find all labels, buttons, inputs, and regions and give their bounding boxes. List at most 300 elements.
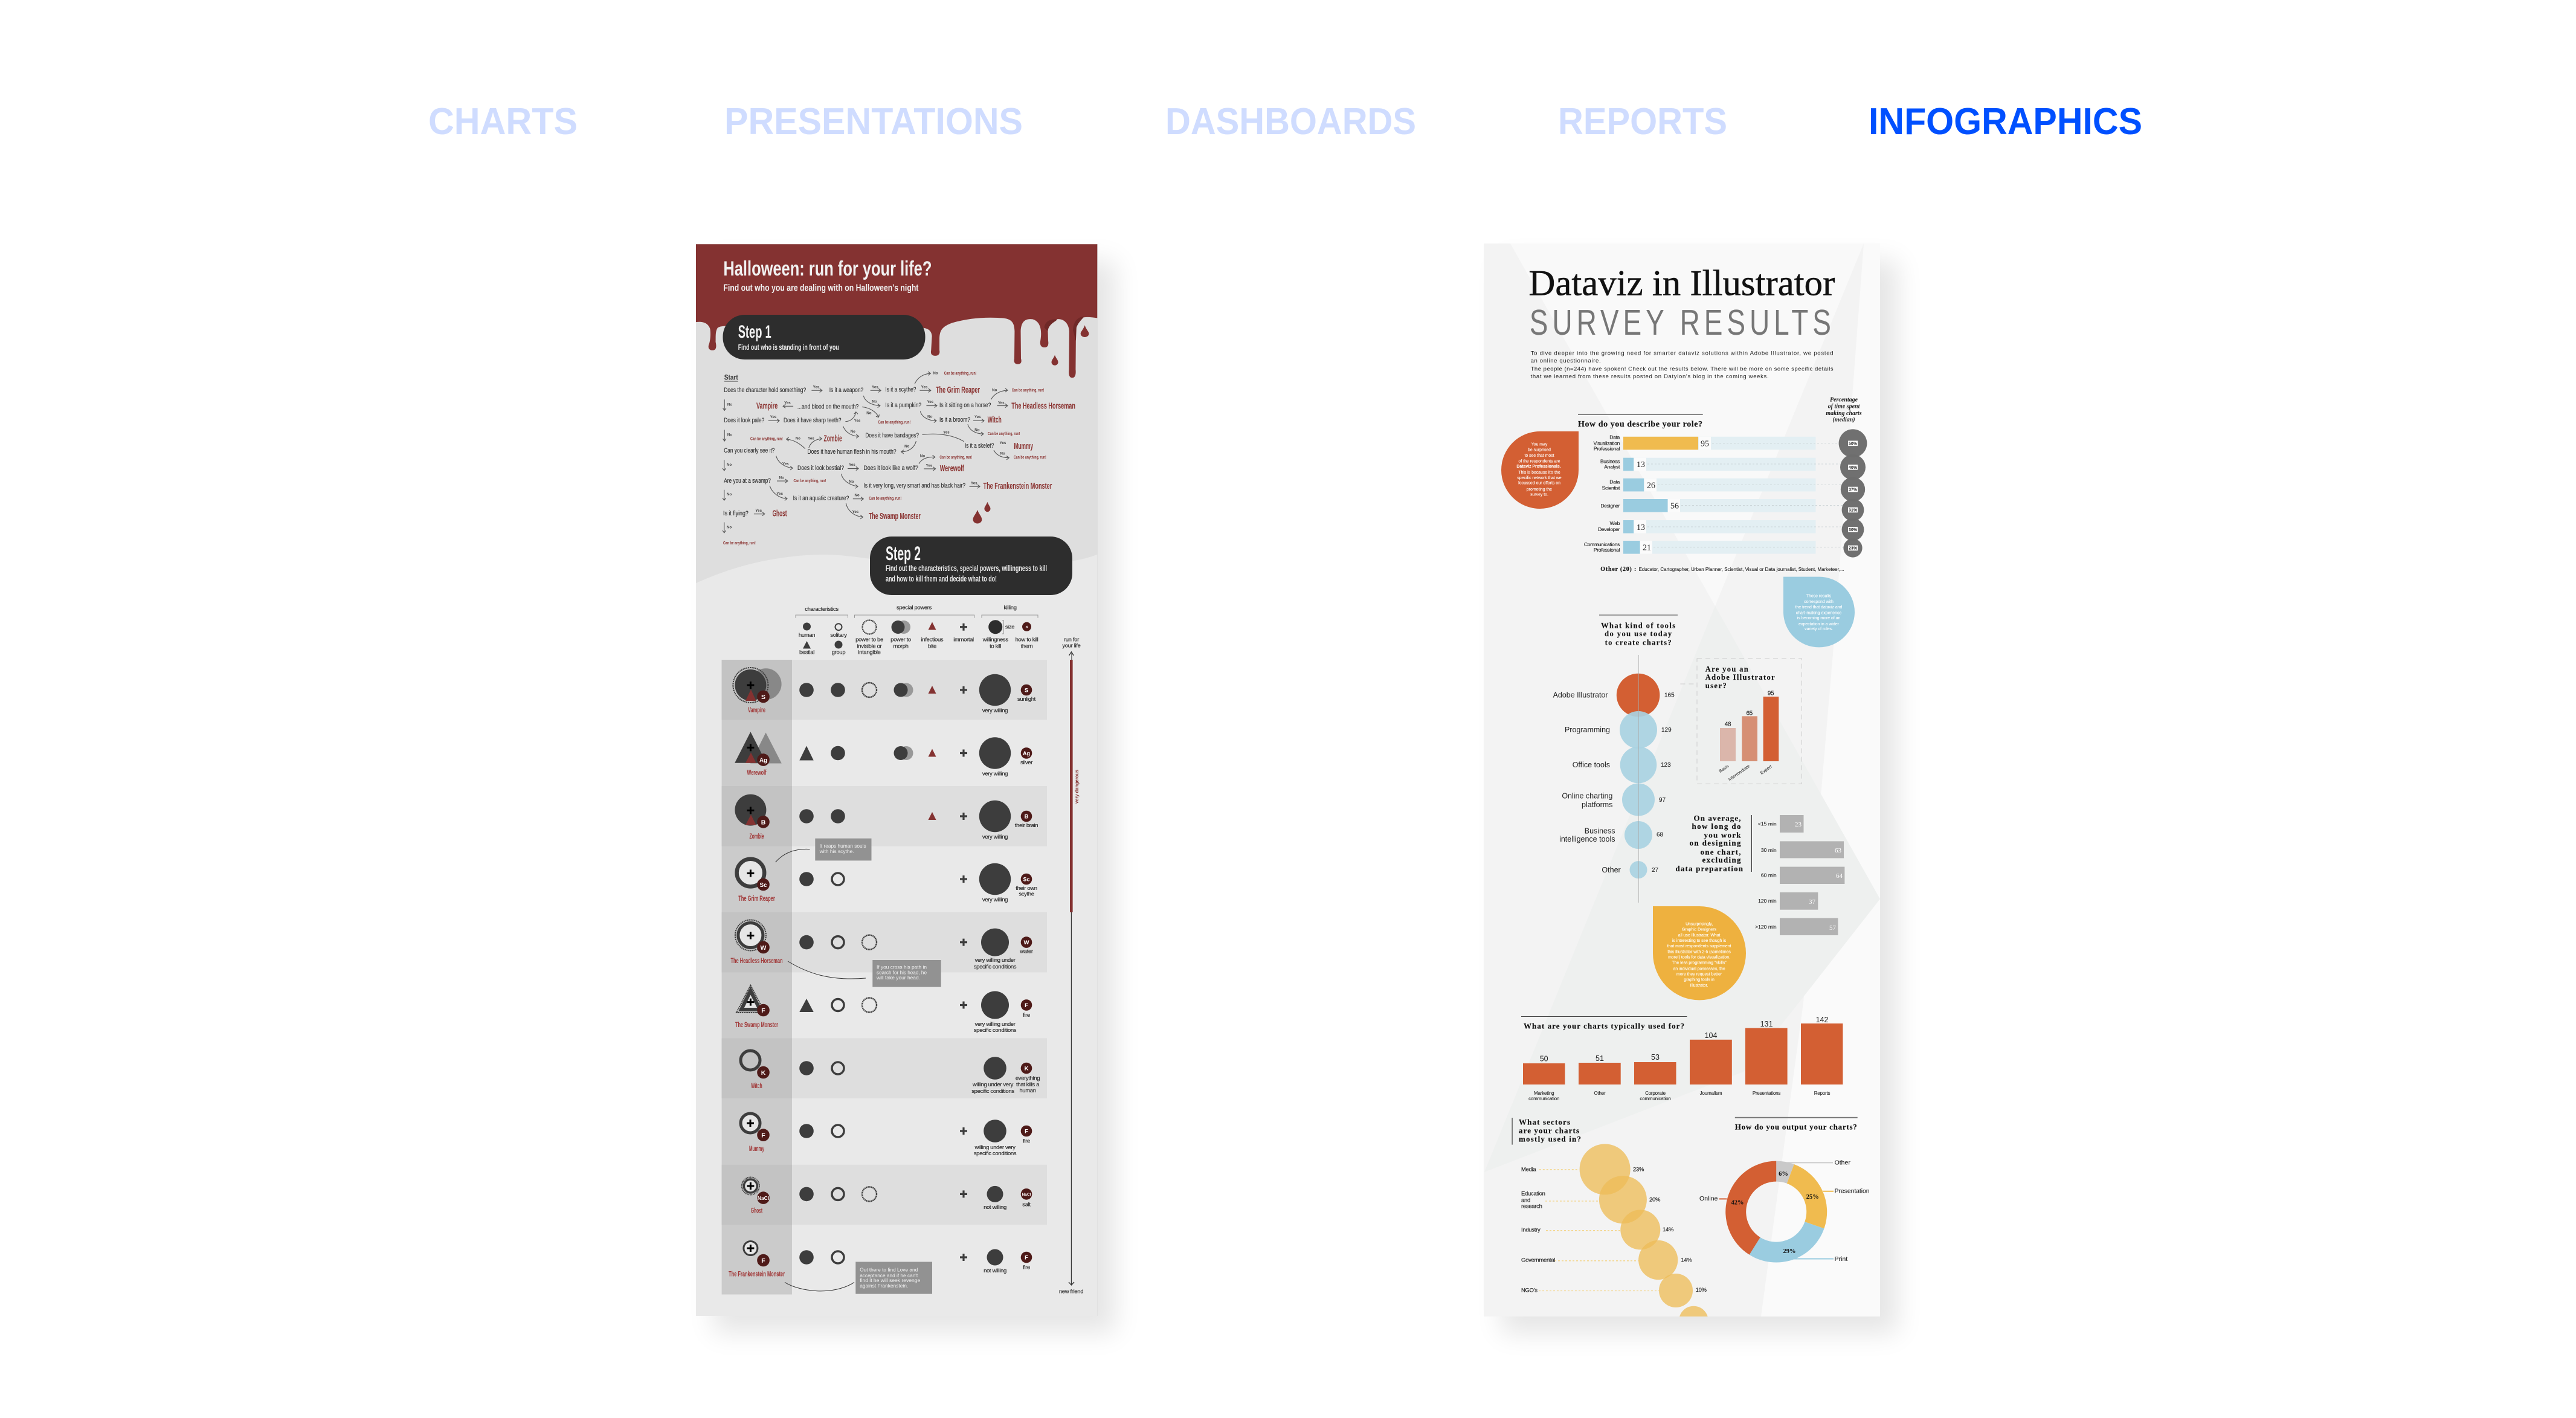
row: The Headless Horseman	[731, 920, 1033, 970]
flowchart questions: Is it flying?	[723, 510, 749, 517]
callout: yellow bubble: The less programming "skills"	[1672, 961, 1727, 965]
row: Zombie: B	[761, 819, 766, 826]
callout: yellow bubble	[1653, 906, 1746, 1000]
table column headers and legend: killing	[1003, 604, 1017, 611]
row: The Frankenstein Monster: fire	[1023, 1264, 1030, 1271]
callout: orange bubble: promoting the	[1527, 488, 1552, 492]
chart: output donut	[1699, 1117, 1870, 1263]
flowchart yes and no labels: No	[933, 372, 938, 376]
intro text: To dive deeper into the growing need for smarter dataviz solutions within Adobe Illustrator, we posted	[1531, 350, 1834, 356]
flowchart outcomes	[723, 370, 1075, 546]
row: Witch: that kills a	[1016, 1081, 1040, 1088]
table column headers and legend: to kill	[990, 643, 1002, 650]
chart: how do you describe your role: Data	[1609, 479, 1620, 485]
flowchart yes and no labels: No	[866, 411, 872, 415]
panel: Halloween infographic	[696, 244, 1098, 1316]
flowchart outcomes: Can be anything, run!	[869, 495, 901, 501]
callout: blue bubble: is becoming more of an	[1797, 616, 1840, 620]
callout: yellow bubble: Illustrator.	[1690, 984, 1708, 988]
navigation tabs: INFOGRAPHICS	[1869, 101, 2142, 143]
chart: time per chart: <15 min	[1758, 821, 1777, 827]
chart: how do you describe your role: Developer	[1598, 526, 1620, 532]
row: Zombie: their brain	[1015, 822, 1038, 829]
flowchart questions: Are you at a swamp?	[724, 477, 771, 485]
row: Witch: specific conditions	[971, 1088, 1014, 1095]
chart: adobe illustrator user: user?	[1705, 682, 1727, 690]
flowchart yes and no labels: No	[872, 399, 877, 404]
flowchart questions: Does it look bestial?	[797, 465, 844, 472]
callout: frankenstein: find it he will seek revenge	[860, 1277, 920, 1283]
flowchart yes and no labels: No	[727, 492, 732, 497]
flowchart yes and no labels: Yes	[808, 437, 814, 441]
callout: blue bubble: variety of roles.	[1805, 627, 1833, 631]
flowchart yes and no labels: Yes	[849, 463, 855, 467]
time share circles	[1839, 429, 1867, 558]
callout: orange bubble: This is because it's the	[1518, 471, 1560, 475]
row: The Swamp Monster: F	[1025, 1002, 1028, 1009]
chart: output donut: Other	[1835, 1159, 1850, 1167]
chart: tools used: Business	[1585, 827, 1615, 835]
callout: frankenstein	[785, 1262, 932, 1294]
chart: how do you describe your role: 56	[1670, 501, 1679, 511]
flowchart yes and no labels: No	[796, 437, 800, 441]
chart: sectors: 10%	[1696, 1287, 1707, 1294]
chart: tools used: intelligence tools	[1559, 835, 1615, 843]
chart: time per chart: 63	[1835, 847, 1841, 854]
callout: grim reaper: with his scythe.	[819, 848, 854, 854]
flowchart yes and no labels: Yes	[813, 385, 820, 389]
chart: how do you describe your role: Data	[1609, 434, 1620, 440]
callout: yellow bubble: Graphic Designers	[1682, 928, 1717, 932]
step 2 box: and how to kill them and decide what to do!	[886, 574, 997, 584]
chart: adobe illustrator user: Adobe Illustrator	[1705, 673, 1775, 682]
danger scale arrow: new friend	[1059, 1289, 1083, 1295]
callout: blue bubble: expectation in a wider	[1798, 622, 1840, 627]
flowchart outcomes: Vampire	[756, 402, 778, 411]
title	[1528, 263, 1835, 343]
time share circles: 50%	[1849, 442, 1858, 446]
row: Zombie: very willing	[982, 834, 1008, 840]
row: The Swamp Monster	[735, 985, 1032, 1034]
chart: output donut: 42%	[1731, 1200, 1744, 1206]
chart: sectors: 23%	[1633, 1167, 1644, 1173]
chart: charts used for	[1521, 1016, 1843, 1101]
callout: frankenstein: acceptance and if he can't	[860, 1272, 918, 1278]
row: The Grim Reaper: very willing	[982, 897, 1008, 903]
flowchart yes and no labels: Yes	[784, 401, 791, 405]
row: Zombie: Zombie	[749, 833, 764, 840]
chart: output donut: Presentation	[1835, 1188, 1870, 1195]
row: The Grim Reaper: The Grim Reaper	[738, 895, 775, 903]
chart: how do you describe your role: Designer	[1600, 503, 1620, 509]
row: Werewolf: Ag	[1023, 750, 1030, 756]
chart: charts used for: communication	[1640, 1096, 1671, 1101]
row: The Swamp Monster: F	[761, 1007, 765, 1014]
callout: headless horseman: search for his head, he	[877, 970, 927, 976]
row: Witch	[741, 1051, 1040, 1095]
blood header and lower wave	[696, 244, 1097, 1316]
flowchart questions: Does it have human flesh in his mouth?	[807, 448, 897, 456]
row: Witch: K	[761, 1069, 766, 1077]
chart: adobe illustrator user: 48	[1725, 721, 1731, 727]
flowchart yes and no labels: Yes	[974, 415, 981, 419]
row: Vampire: sunlight	[1017, 696, 1036, 703]
chart: charts used for: Other	[1594, 1091, 1606, 1096]
flowchart yes and no labels: No	[904, 444, 910, 448]
callout: orange bubble: survey to.	[1530, 493, 1548, 497]
flowchart outcomes: The Frankenstein Monster	[984, 482, 1052, 491]
chart: time per chart: 57	[1829, 924, 1837, 932]
row: Mummy: F	[761, 1132, 765, 1139]
title: Halloween: run for your life?	[723, 257, 932, 280]
flowchart yes and no labels: Yes	[854, 419, 861, 423]
row: The Headless Horseman: very willing under	[974, 957, 1016, 964]
row: The Frankenstein Monster	[729, 1241, 1032, 1278]
chart: sectors: What sectors	[1519, 1118, 1570, 1126]
flowchart outcomes: Can be anything, run!	[988, 431, 1020, 436]
table column headers and legend: size	[1005, 624, 1014, 631]
flowchart questions: Is it a weapon?	[829, 387, 863, 394]
flowchart outcomes: Witch	[988, 416, 1002, 425]
row: Mummy: F	[1025, 1129, 1028, 1135]
row: The Frankenstein Monster: F	[1025, 1254, 1028, 1262]
chart: time per chart: 30 min	[1761, 847, 1777, 853]
chart: tools used: Other	[1602, 866, 1621, 874]
chart: adobe illustrator user: Expert	[1759, 764, 1773, 776]
danger scale arrow	[1059, 652, 1083, 1295]
row: The Grim Reaper: Sc	[1023, 876, 1030, 882]
flowchart yes and no labels: No	[727, 433, 732, 437]
row: The Grim Reaper: scythe	[1019, 891, 1034, 898]
chart: charts used for: What are your charts typically used for?	[1524, 1021, 1684, 1030]
table column headers and legend: immortal	[953, 637, 974, 643]
icon: blood drops	[973, 325, 1089, 523]
chart: tools used: 165	[1664, 692, 1675, 699]
table column headers and legend: group	[832, 649, 845, 656]
chart: charts used for: 142	[1816, 1016, 1828, 1024]
callout: grim reaper	[776, 839, 871, 862]
chart: how do you describe your role: 95	[1701, 440, 1709, 449]
intro text: that we learned from these results posted on Datylon's blog in the coming weeks.	[1531, 373, 1769, 380]
flowchart outcomes: Can be anything, run!	[1014, 454, 1046, 460]
row: Werewolf: Werewolf	[747, 770, 767, 777]
chart: how do you describe your role: 13	[1637, 460, 1645, 469]
flowchart yes and no labels: Yes	[971, 482, 977, 486]
chart: charts used for: 50	[1540, 1055, 1548, 1063]
flowchart yes and no labels: No	[974, 428, 980, 432]
table column headers and legend: bite	[928, 643, 936, 650]
row: Witch: everything	[1016, 1075, 1040, 1082]
callout: yellow bubble: that most respondents supplement	[1667, 944, 1731, 949]
chart: sectors: research	[1521, 1204, 1542, 1210]
flowchart outcomes: Can be anything, run!	[944, 370, 976, 376]
flowchart outcomes: Can be anything, run!	[750, 436, 783, 441]
chart: how do you describe your role	[1578, 396, 1867, 573]
chart: tools used: Programming	[1565, 726, 1610, 734]
row: The Headless Horseman: W	[1024, 939, 1029, 946]
row: The Grim Reaper	[737, 859, 1037, 903]
row: The Swamp Monster: The Swamp Monster	[735, 1022, 778, 1029]
chart: time per chart: 37	[1809, 898, 1816, 906]
chart: time per chart	[1676, 813, 1844, 935]
chart: tools used: 129	[1661, 727, 1672, 733]
row: The Grim Reaper: Sc	[759, 882, 767, 889]
flowchart yes and no labels: No	[779, 476, 784, 480]
flowchart yes and no labels: No	[727, 525, 732, 529]
flowchart yes and no labels: Yes	[755, 509, 762, 513]
chart: sectors: and	[1521, 1197, 1530, 1204]
flowchart yes and no labels: Yes	[872, 385, 878, 389]
table column headers and legend: power to	[890, 637, 911, 643]
table column headers and legend: run for	[1064, 637, 1079, 643]
chart: time per chart: on designing	[1689, 839, 1741, 848]
flowchart yes and no labels: Yes	[852, 510, 859, 514]
flowchart questions: Does it have sharp teeth?	[784, 417, 841, 424]
flowchart questions: Does the character hold something?	[724, 387, 806, 394]
callout: orange bubble: focussed our efforts on	[1518, 482, 1560, 486]
flowchart questions: Is it a broom?	[939, 416, 970, 424]
chart: output donut: 29%	[1783, 1248, 1795, 1255]
chart: how do you describe your role: Web	[1610, 520, 1620, 526]
chart: how do you describe your role: Business	[1600, 458, 1620, 464]
flowchart yes and no labels: Yes	[770, 415, 777, 419]
navigation tabs: REPORTS	[1558, 101, 1727, 143]
chart: output donut: 6%	[1779, 1171, 1788, 1178]
row: Witch: human	[1019, 1088, 1036, 1094]
row: Witch: Witch	[751, 1083, 762, 1090]
time share circles: 23%	[1849, 546, 1858, 551]
flowchart questions: ...and blood on the mouth?	[797, 404, 858, 411]
step 1 box	[723, 315, 926, 359]
callout: blue bubble	[1783, 577, 1855, 647]
chart: tools used	[1553, 615, 1678, 903]
callout: blue bubble: chart-making experience	[1796, 611, 1841, 615]
time share circles: 30%	[1849, 528, 1858, 532]
callout: orange bubble: Dataviz Professionals.	[1516, 465, 1561, 469]
flowchart yes and no labels: No	[1000, 452, 1005, 456]
chart: sectors: mostly used in?	[1519, 1134, 1581, 1143]
table column headers and legend: bestial	[799, 649, 814, 656]
chart: output donut: 25%	[1806, 1194, 1819, 1200]
row: Mummy: specific conditions	[974, 1150, 1017, 1157]
callout: orange bubble: to see that most	[1524, 454, 1554, 458]
step 2 box	[870, 537, 1072, 595]
chart: tools used: 123	[1661, 762, 1671, 769]
flowchart questions: Is it very long, very smart and has black hair?	[864, 482, 965, 489]
flowchart questions: Start	[724, 373, 738, 381]
title	[723, 257, 932, 294]
row: The Headless Horseman: water	[1019, 949, 1033, 955]
title: Dataviz in Illustrator	[1528, 263, 1835, 303]
row: Witch: willing under very	[972, 1081, 1014, 1088]
chart: time per chart: data preparation	[1676, 864, 1744, 873]
chart: tools used: Online charting	[1562, 792, 1612, 801]
chart: charts used for: 53	[1651, 1053, 1660, 1062]
flowchart questions: Is it a pumpkin?	[885, 402, 921, 409]
chart: output donut: Online	[1699, 1195, 1718, 1202]
chart: sectors: NGO's	[1521, 1287, 1538, 1294]
flowchart outcomes: Can be anything, run!	[794, 478, 826, 483]
chart: sectors: are your charts	[1519, 1126, 1579, 1135]
flowchart yes and no labels: No	[992, 388, 997, 392]
flowchart yes and no labels: Yes	[927, 400, 934, 404]
chart: how do you describe your role: Scientist	[1602, 485, 1620, 491]
step 1 box: Step 1	[738, 322, 771, 342]
percentage heading: making charts	[1826, 410, 1862, 417]
other roles note: Educator, Cartographer, Urban Planner, Scientist, Visual or Data journalist, Student, Marketeer,...	[1639, 566, 1844, 572]
callout: yellow bubble: is interesting to see though is	[1672, 939, 1727, 943]
step 2 box: Find out the characteristics, special powers, willingness to kill	[886, 563, 1047, 573]
navigation tabs: CHARTS	[428, 101, 578, 143]
intro text: an online questionnaire.	[1531, 358, 1601, 364]
callout: yellow bubble: more!) tools for data visualization.	[1668, 956, 1730, 959]
flowchart yes and no labels: Yes	[998, 401, 1005, 405]
table column headers and legend: them	[1021, 643, 1033, 650]
intro text	[1531, 350, 1834, 380]
row: The Headless Horseman: W	[761, 944, 767, 952]
row: Ghost	[742, 1177, 1032, 1215]
row: Werewolf: Ag	[759, 758, 767, 764]
chart: sectors: Media	[1521, 1167, 1536, 1173]
table column headers and legend: intangible	[858, 649, 881, 656]
flowchart yes and no labels: Yes	[943, 430, 950, 434]
table column headers and legend: invisible or	[857, 643, 882, 650]
navigation tabs	[428, 101, 2142, 143]
callout: blue bubble: the trend that dataviz and	[1795, 605, 1843, 610]
percentage heading: of time spent	[1828, 404, 1861, 410]
intro text: The people (n=244) have spoken! Check out the results below. There will be more on some specific details	[1531, 366, 1834, 372]
chart: sectors: Financial	[1521, 1316, 1543, 1323]
chart: sectors: Industry	[1521, 1227, 1541, 1234]
chart: how do you describe your role: Professional	[1594, 446, 1620, 452]
table column headers and legend: special powers	[897, 604, 932, 611]
chart: how do you describe your role: Visualization	[1593, 440, 1620, 446]
callout: orange bubble: be surprised	[1528, 448, 1551, 453]
callout: headless horseman: If you cross his path in	[877, 964, 927, 970]
chart: adobe illustrator user: 65	[1746, 711, 1753, 717]
row: Ghost: salt	[1022, 1201, 1031, 1208]
flowchart outcomes: Can be anything, run!	[939, 454, 972, 460]
row: Vampire: S	[1025, 688, 1028, 694]
row: The Swamp Monster: specific conditions	[974, 1027, 1017, 1034]
navigation tabs: DASHBOARDS	[1165, 101, 1416, 143]
flowchart questions: Is it sitting on a horse?	[939, 402, 991, 409]
chart: time per chart: one chart,	[1700, 847, 1741, 856]
callout: yellow bubble: Unsurprisingly,	[1686, 922, 1713, 926]
flowchart outcomes: Mummy	[1014, 442, 1033, 451]
chart: time per chart: >120 min	[1755, 924, 1777, 930]
flowchart yes and no labels: Yes	[776, 492, 783, 496]
step 2 box: Step 2	[886, 543, 921, 564]
callout: frankenstein: against Frankenstein.	[860, 1283, 908, 1289]
chart: time per chart: how long do	[1692, 822, 1741, 831]
flowchart outcomes: Zombie	[824, 434, 842, 443]
chart: how do you describe your role: How do you describe your role?	[1578, 420, 1702, 429]
chart: sectors: 14%	[1663, 1226, 1674, 1233]
chart: tools used: 97	[1659, 797, 1666, 804]
chart: charts used for: 51	[1596, 1054, 1604, 1063]
flowchart questions: Does it look like a wolf?	[864, 465, 918, 472]
table column headers and legend: how to kill	[1016, 637, 1038, 643]
chart: sectors	[1512, 1118, 1708, 1335]
chart: tools used: 68	[1657, 832, 1664, 839]
callout: yellow bubble: graphing tools in	[1684, 978, 1715, 982]
chart: how do you describe your role: Professional	[1594, 547, 1620, 553]
chart: adobe illustrator user: Basic	[1718, 763, 1730, 774]
flowchart yes and no labels: No	[920, 454, 925, 458]
row: Werewolf: silver	[1020, 759, 1032, 766]
chart: sectors: 20%	[1649, 1196, 1661, 1203]
row: The Headless Horseman: The Headless Horseman	[731, 958, 783, 965]
chart: tools used: to create charts?	[1605, 638, 1672, 646]
flowchart outcomes: Ghost	[773, 509, 787, 519]
flowchart yes and no labels: No	[851, 430, 855, 434]
title: Find out who you are dealing with on Halloween's night	[723, 283, 918, 294]
table column headers and legend: solitary	[830, 632, 847, 639]
row: Ghost: Ghost	[751, 1208, 762, 1215]
table column headers and legend: human	[799, 632, 815, 639]
callout: headless horseman: will take your head.	[876, 975, 920, 981]
chart: charts used for: 104	[1705, 1031, 1717, 1040]
chart: tools used: platforms	[1582, 801, 1612, 809]
step 1 box: Find out who is standing in front of you	[738, 343, 839, 352]
chart: sectors: Education	[1521, 1191, 1545, 1197]
row: Ghost: not willing	[984, 1204, 1006, 1211]
flowchart yes and no labels: Yes	[926, 463, 933, 468]
flowchart yes and no labels: No	[849, 480, 854, 484]
row: Mummy: Mummy	[749, 1146, 764, 1153]
flowchart questions: Does it have bandages?	[865, 432, 919, 439]
row: Werewolf: very willing	[982, 771, 1008, 778]
table column headers and legend: ×	[1025, 625, 1028, 630]
row: The Swamp Monster: very willing under	[974, 1021, 1016, 1028]
chart: adobe illustrator user: Intermediate	[1727, 763, 1751, 782]
percentage heading	[1826, 396, 1862, 423]
callout: orange bubble: of the respondents are	[1519, 459, 1560, 464]
callout: grim reaper: It reaps human souls	[820, 843, 866, 849]
row: Mummy: willing under very	[974, 1144, 1016, 1151]
flowchart questions: Does it look pale?	[724, 417, 764, 424]
flowchart yes and no labels	[727, 372, 1006, 529]
table rows background	[722, 660, 1047, 1294]
table column headers and legend	[796, 604, 1081, 656]
row: Ghost: NaCl	[758, 1195, 769, 1201]
flowchart yes and no labels: Yes	[782, 462, 789, 466]
chart: time per chart: 64	[1836, 872, 1843, 880]
row: The Swamp Monster: fire	[1023, 1012, 1030, 1019]
row: Zombie	[735, 794, 1038, 840]
flowchart outcomes: The Grim Reaper	[936, 385, 980, 395]
callout: yellow bubble: all use Illustrator. What	[1678, 933, 1721, 938]
callout: yellow bubble: this Illustrator with 2-5 (sometimes	[1667, 950, 1731, 954]
chart: how do you describe your role: 21	[1643, 544, 1651, 553]
chart: charts used for: Marketing	[1534, 1091, 1554, 1096]
flowchart outcomes: Werewolf	[940, 464, 964, 474]
chart: adobe illustrator user: Are you an	[1705, 665, 1748, 673]
chart: sectors: 14%	[1681, 1257, 1692, 1263]
callout: yellow bubble: an individual possesses, the	[1673, 967, 1725, 971]
chart: charts used for: communication	[1528, 1096, 1559, 1101]
chart: charts used for: Presentations	[1753, 1091, 1780, 1096]
chart: time per chart: 120 min	[1758, 898, 1777, 904]
callout: orange bubble: You may	[1531, 442, 1548, 447]
row: Vampire: Vampire	[748, 707, 765, 714]
row: Vampire	[733, 668, 1036, 714]
chart: adobe illustrator user: 95	[1768, 690, 1774, 697]
flowchart outcomes: The Swamp Monster	[869, 512, 921, 521]
chart: tools used: What kind of tools	[1601, 621, 1675, 630]
table column headers and legend: your life	[1062, 643, 1081, 649]
